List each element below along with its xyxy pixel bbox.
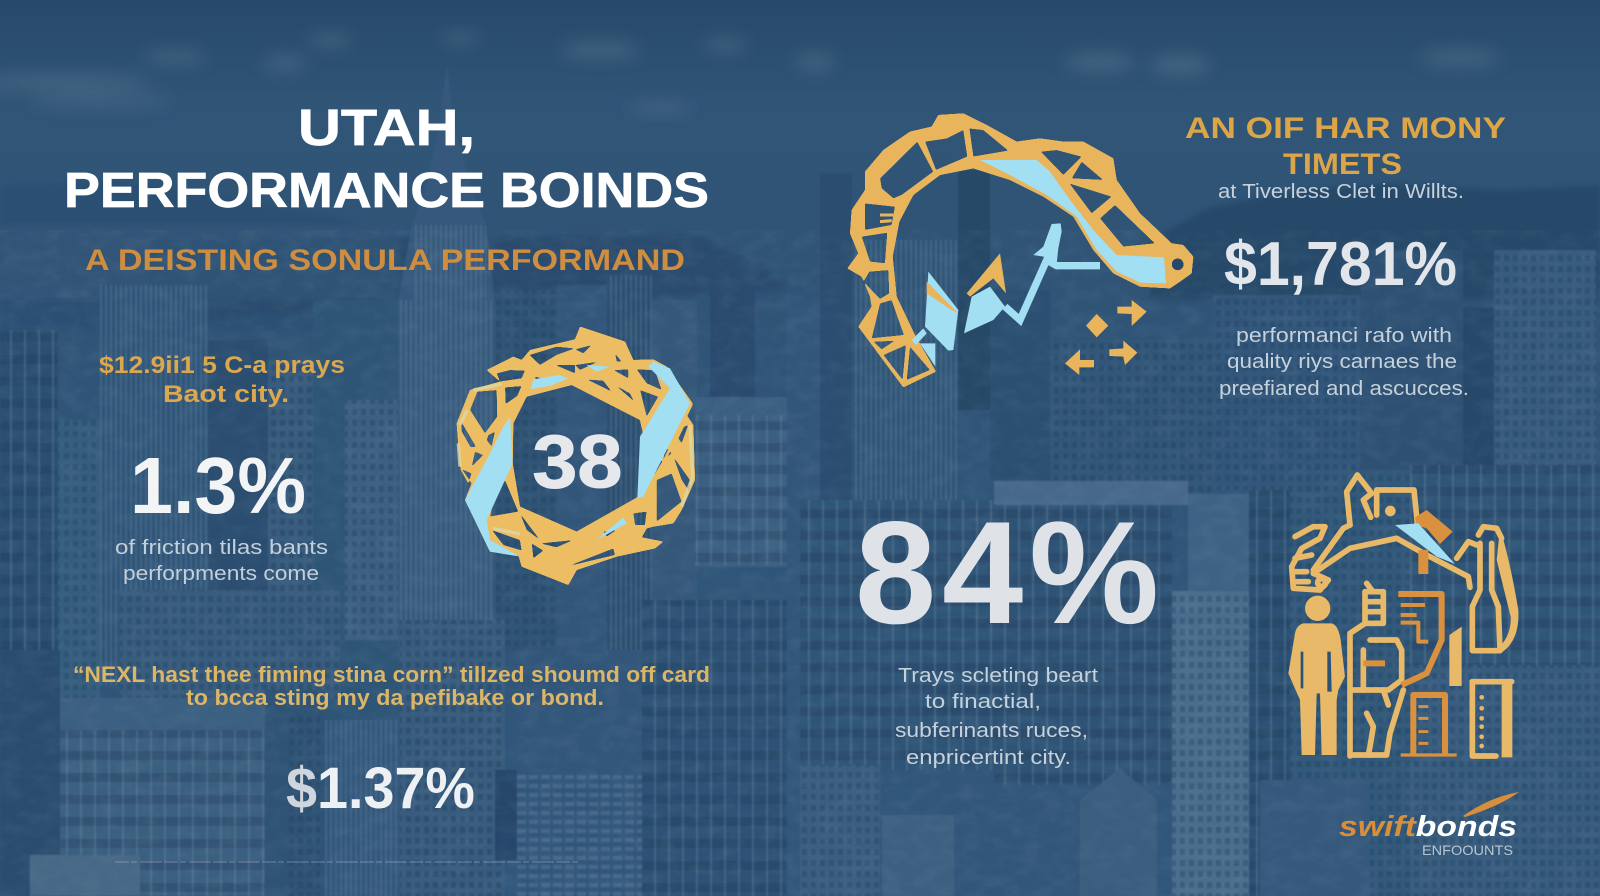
left stat heading (99, 352, 345, 408)
quote (73, 662, 710, 710)
small arrows (1065, 300, 1147, 375)
title (64, 99, 709, 218)
quote: “NEXL hast thee fiming stina corn” tillzed shoumd off card (73, 662, 710, 687)
big stat caption: to finactial, (925, 691, 1041, 713)
right top text block (1185, 112, 1506, 400)
icon: person, machinery and tools (1288, 475, 1518, 757)
left stat heading: Baot city. (163, 381, 289, 408)
right subheading: at Tiverless Clet in Willts. (1218, 181, 1464, 203)
right lower buildings (800, 500, 996, 770)
big stat caption: Trays scleting beart (898, 665, 1098, 687)
rising line arrow (1005, 260, 1100, 320)
left stat block (99, 352, 345, 585)
left stat heading: $12.9ii1 5 C-a prays (99, 352, 345, 379)
big stat caption: enpricertint city. (906, 747, 1071, 769)
roof window dot (1385, 506, 1396, 516)
ruler (1472, 682, 1496, 756)
icon: horseshoe with rising arrow (847, 113, 1193, 387)
big stat 84%: 84% (855, 491, 1159, 654)
right heading: TIMETS (1283, 148, 1402, 181)
logo swoosh (1463, 792, 1519, 817)
right caption: performanci rafo with (1236, 324, 1452, 347)
horseshoe frame (847, 113, 1193, 387)
big stat caption: subferinants ruces, (895, 720, 1088, 742)
subtitle: A DEISTING SONULA PERFORMAND (85, 244, 685, 277)
ring number: 38 (532, 420, 622, 504)
right heading: AN OIF HAR MONY (1185, 112, 1506, 145)
tall spire tower (398, 65, 495, 660)
icon: woven ring with 38 (457, 327, 695, 585)
ring blue bands (465, 362, 690, 557)
left stat caption (115, 537, 328, 585)
quote: to bcca sting my da pefibake or bond. (186, 685, 604, 710)
bottle (1472, 543, 1500, 651)
logo (1339, 792, 1519, 858)
left foreground (0, 650, 60, 896)
right number: $1,781% (1224, 230, 1457, 299)
left buildings (0, 330, 58, 896)
right heading (1185, 112, 1506, 181)
orange parts (1363, 594, 1457, 755)
left stat caption: perforpments come (123, 563, 319, 585)
right caption: preefiared and ascucces. (1219, 377, 1469, 400)
left stat number: 1.3% (130, 441, 306, 530)
right caption (1219, 324, 1469, 400)
right upper buildings (787, 300, 820, 896)
title: UTAH, (298, 99, 475, 156)
ring lattice (457, 327, 695, 585)
machine (1365, 592, 1383, 623)
right caption: quality riys carnaes the (1227, 350, 1457, 373)
roof and excavator linework (1292, 475, 1512, 756)
logo wordmark: swift bonds (1339, 811, 1517, 843)
big stat caption (895, 665, 1098, 769)
left stat caption: of friction tilas bants (115, 537, 328, 559)
crystal shards (925, 272, 958, 351)
person (1288, 596, 1345, 755)
horseshoe blue band (980, 160, 1166, 283)
logo tagline: ENFOOUNTS (1422, 842, 1513, 858)
bottom left stat: $1.37% (286, 756, 475, 821)
title: PERFORMANCE BOINDS (64, 164, 709, 218)
